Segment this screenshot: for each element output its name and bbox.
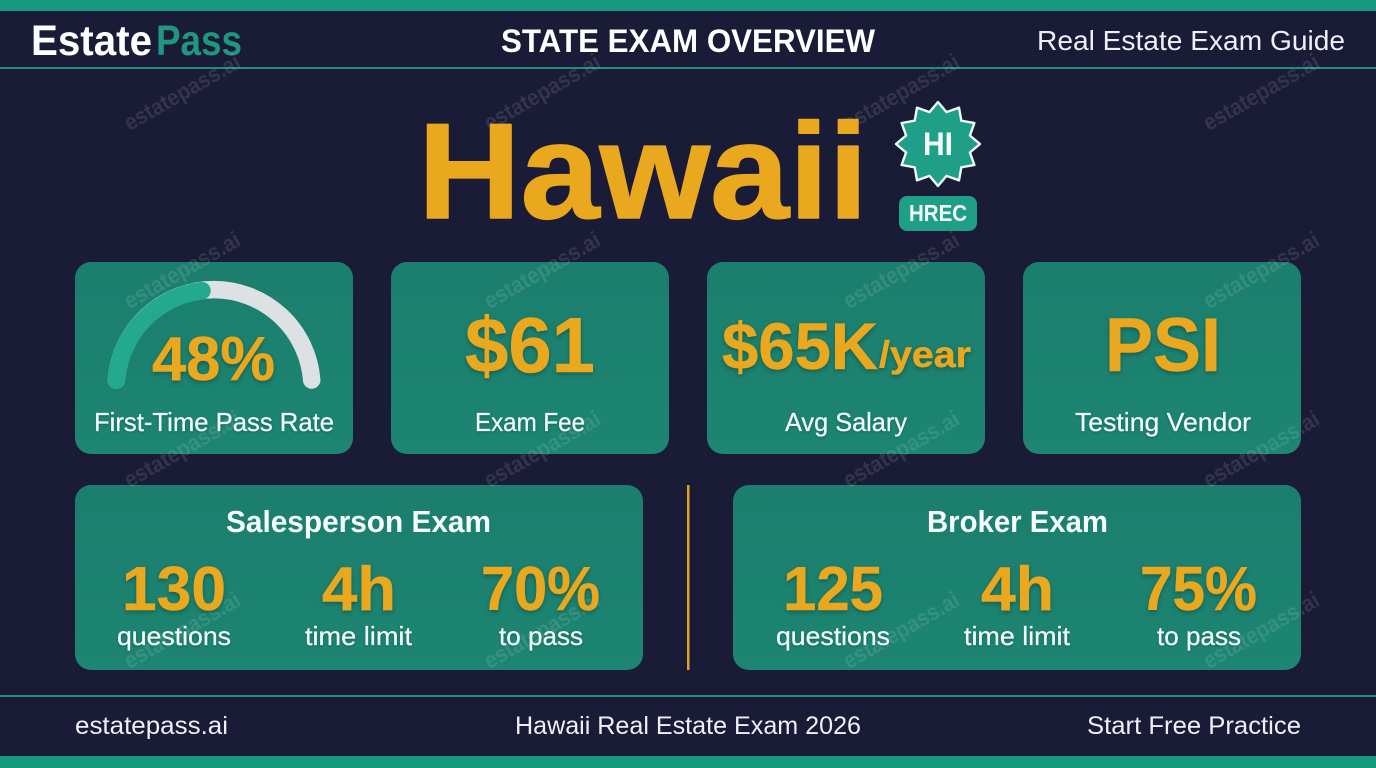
commission label: HREC — [909, 200, 967, 226]
gauge fill — [116, 291, 202, 380]
logo: Pass — [156, 17, 242, 65]
salary content — [722, 309, 971, 437]
watermarks: estatepass.ai — [479, 586, 605, 674]
pass value: 70% — [481, 555, 600, 624]
watermarks: estatepass.ai — [838, 586, 964, 674]
icon: star seal — [896, 102, 980, 186]
pass rate content — [94, 290, 334, 437]
logo: Estate — [31, 17, 152, 65]
watermarks: estatepass.ai — [1198, 405, 1324, 493]
state badge — [896, 102, 980, 231]
commission pill — [899, 196, 977, 231]
questions label: questions — [117, 621, 231, 651]
header — [0, 17, 1376, 69]
questions label: questions — [776, 621, 890, 651]
stat card: salary panel — [707, 262, 985, 454]
broker heading: Broker Exam — [927, 504, 1108, 539]
footer — [0, 695, 1376, 740]
top band — [0, 0, 1376, 11]
fee label: Exam Fee — [475, 407, 585, 437]
questions value: 125 — [783, 555, 883, 624]
watermarks: estatepass.ai — [1198, 48, 1324, 136]
watermarks: estatepass.ai — [119, 586, 245, 674]
salary unit: /year — [879, 334, 971, 375]
gauge track — [116, 290, 312, 380]
time value: 4h — [981, 555, 1054, 624]
panel: salesperson exam — [117, 504, 600, 651]
watermarks: estatepass.ai — [838, 48, 964, 136]
fee value: $61 — [465, 301, 595, 389]
watermarks: estatepass.ai — [479, 405, 605, 493]
footer center text: Hawaii Real Estate Exam 2026 — [515, 712, 861, 740]
vendor content — [1075, 303, 1251, 437]
time label: time limit — [964, 621, 1071, 651]
watermarks: estatepass.ai — [119, 226, 245, 314]
footer call to action: Start Free Practice — [1087, 712, 1301, 740]
watermarks: estatepass.ai — [1198, 586, 1324, 674]
pass rate value: 48% — [152, 325, 275, 394]
panel: broker exam — [776, 504, 1257, 651]
salary label: Avg Salary — [785, 407, 907, 437]
questions value: 130 — [122, 555, 226, 624]
pass label: to pass — [499, 621, 583, 651]
bottom band — [0, 756, 1376, 768]
watermarks: estatepass.ai — [838, 226, 964, 314]
watermarks: estatepass.ai — [479, 48, 605, 136]
watermarks: estatepass.ai — [119, 405, 245, 493]
salesperson heading: Salesperson Exam — [226, 504, 491, 539]
pass rate label: First-Time Pass Rate — [94, 407, 334, 437]
stat card: exam fee panel — [391, 262, 669, 454]
time label: time limit — [305, 621, 413, 651]
exam fee content — [465, 301, 595, 437]
title: Hawaii — [418, 95, 868, 247]
watermarks: estatepass.ai — [838, 405, 964, 493]
vendor value: PSI — [1105, 303, 1221, 388]
stat card: vendor panel — [1023, 262, 1301, 454]
watermarks: estatepass.ai — [1198, 226, 1324, 314]
watermarks: estatepass.ai — [479, 226, 605, 314]
header title: STATE EXAM OVERVIEW — [501, 23, 876, 59]
state code: HI — [923, 126, 953, 162]
vertical divider — [687, 485, 690, 670]
logo — [31, 17, 242, 65]
footer site: estatepass.ai — [75, 712, 228, 740]
pass value: 75% — [1140, 555, 1257, 624]
watermarks — [119, 48, 1324, 674]
panel: salesperson background — [75, 485, 643, 670]
pass label: to pass — [1157, 621, 1241, 651]
time value: 4h — [322, 555, 396, 624]
panel: broker background — [733, 485, 1301, 670]
stat card: pass rate panel — [75, 262, 353, 454]
watermarks: estatepass.ai — [119, 48, 245, 136]
vendor label: Testing Vendor — [1075, 407, 1251, 437]
header subtitle: Real Estate Exam Guide — [1037, 25, 1345, 56]
salary value: $65K — [722, 309, 878, 383]
